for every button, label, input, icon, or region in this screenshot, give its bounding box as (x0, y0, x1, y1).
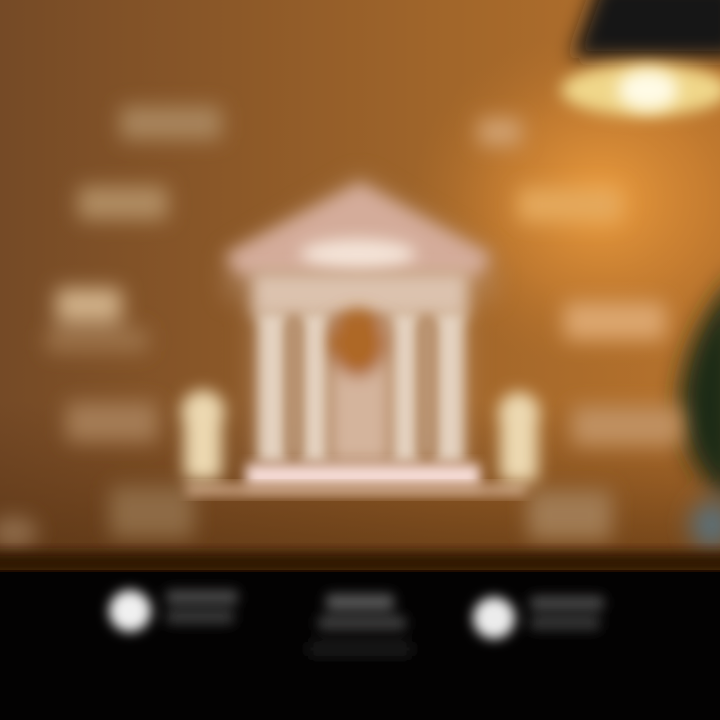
base (246, 464, 480, 488)
right text labels (478, 118, 682, 540)
footer item center (308, 594, 412, 656)
left figure (181, 390, 225, 480)
platform (186, 484, 526, 496)
footer item left (109, 590, 238, 632)
left text labels (46, 106, 222, 538)
label 3 body (46, 328, 148, 352)
column gaps (288, 320, 434, 455)
plant (679, 270, 720, 549)
label 5 (110, 486, 194, 538)
label 4 (66, 402, 158, 442)
pediment roof (226, 183, 490, 275)
footer item right (473, 596, 604, 639)
label 1 (120, 106, 222, 140)
doorway (330, 309, 390, 462)
right figure (498, 392, 540, 482)
label 10 (528, 490, 612, 540)
lamp shade (572, 0, 720, 58)
label 9 (572, 406, 682, 446)
footer band (0, 552, 720, 720)
label 7 (518, 188, 622, 222)
columns (258, 312, 464, 462)
lamp light (561, 64, 720, 116)
hanging lamp (561, 0, 720, 116)
pediment inner (300, 239, 416, 269)
label 2 (78, 186, 168, 220)
label 6 (478, 118, 522, 146)
label 3 heading (56, 288, 122, 322)
small left blob (0, 516, 38, 548)
label 8 (564, 302, 666, 340)
entablature (252, 272, 468, 316)
temple shadow glow (225, 175, 495, 470)
temple illustration (186, 175, 526, 496)
background wall (0, 0, 720, 570)
